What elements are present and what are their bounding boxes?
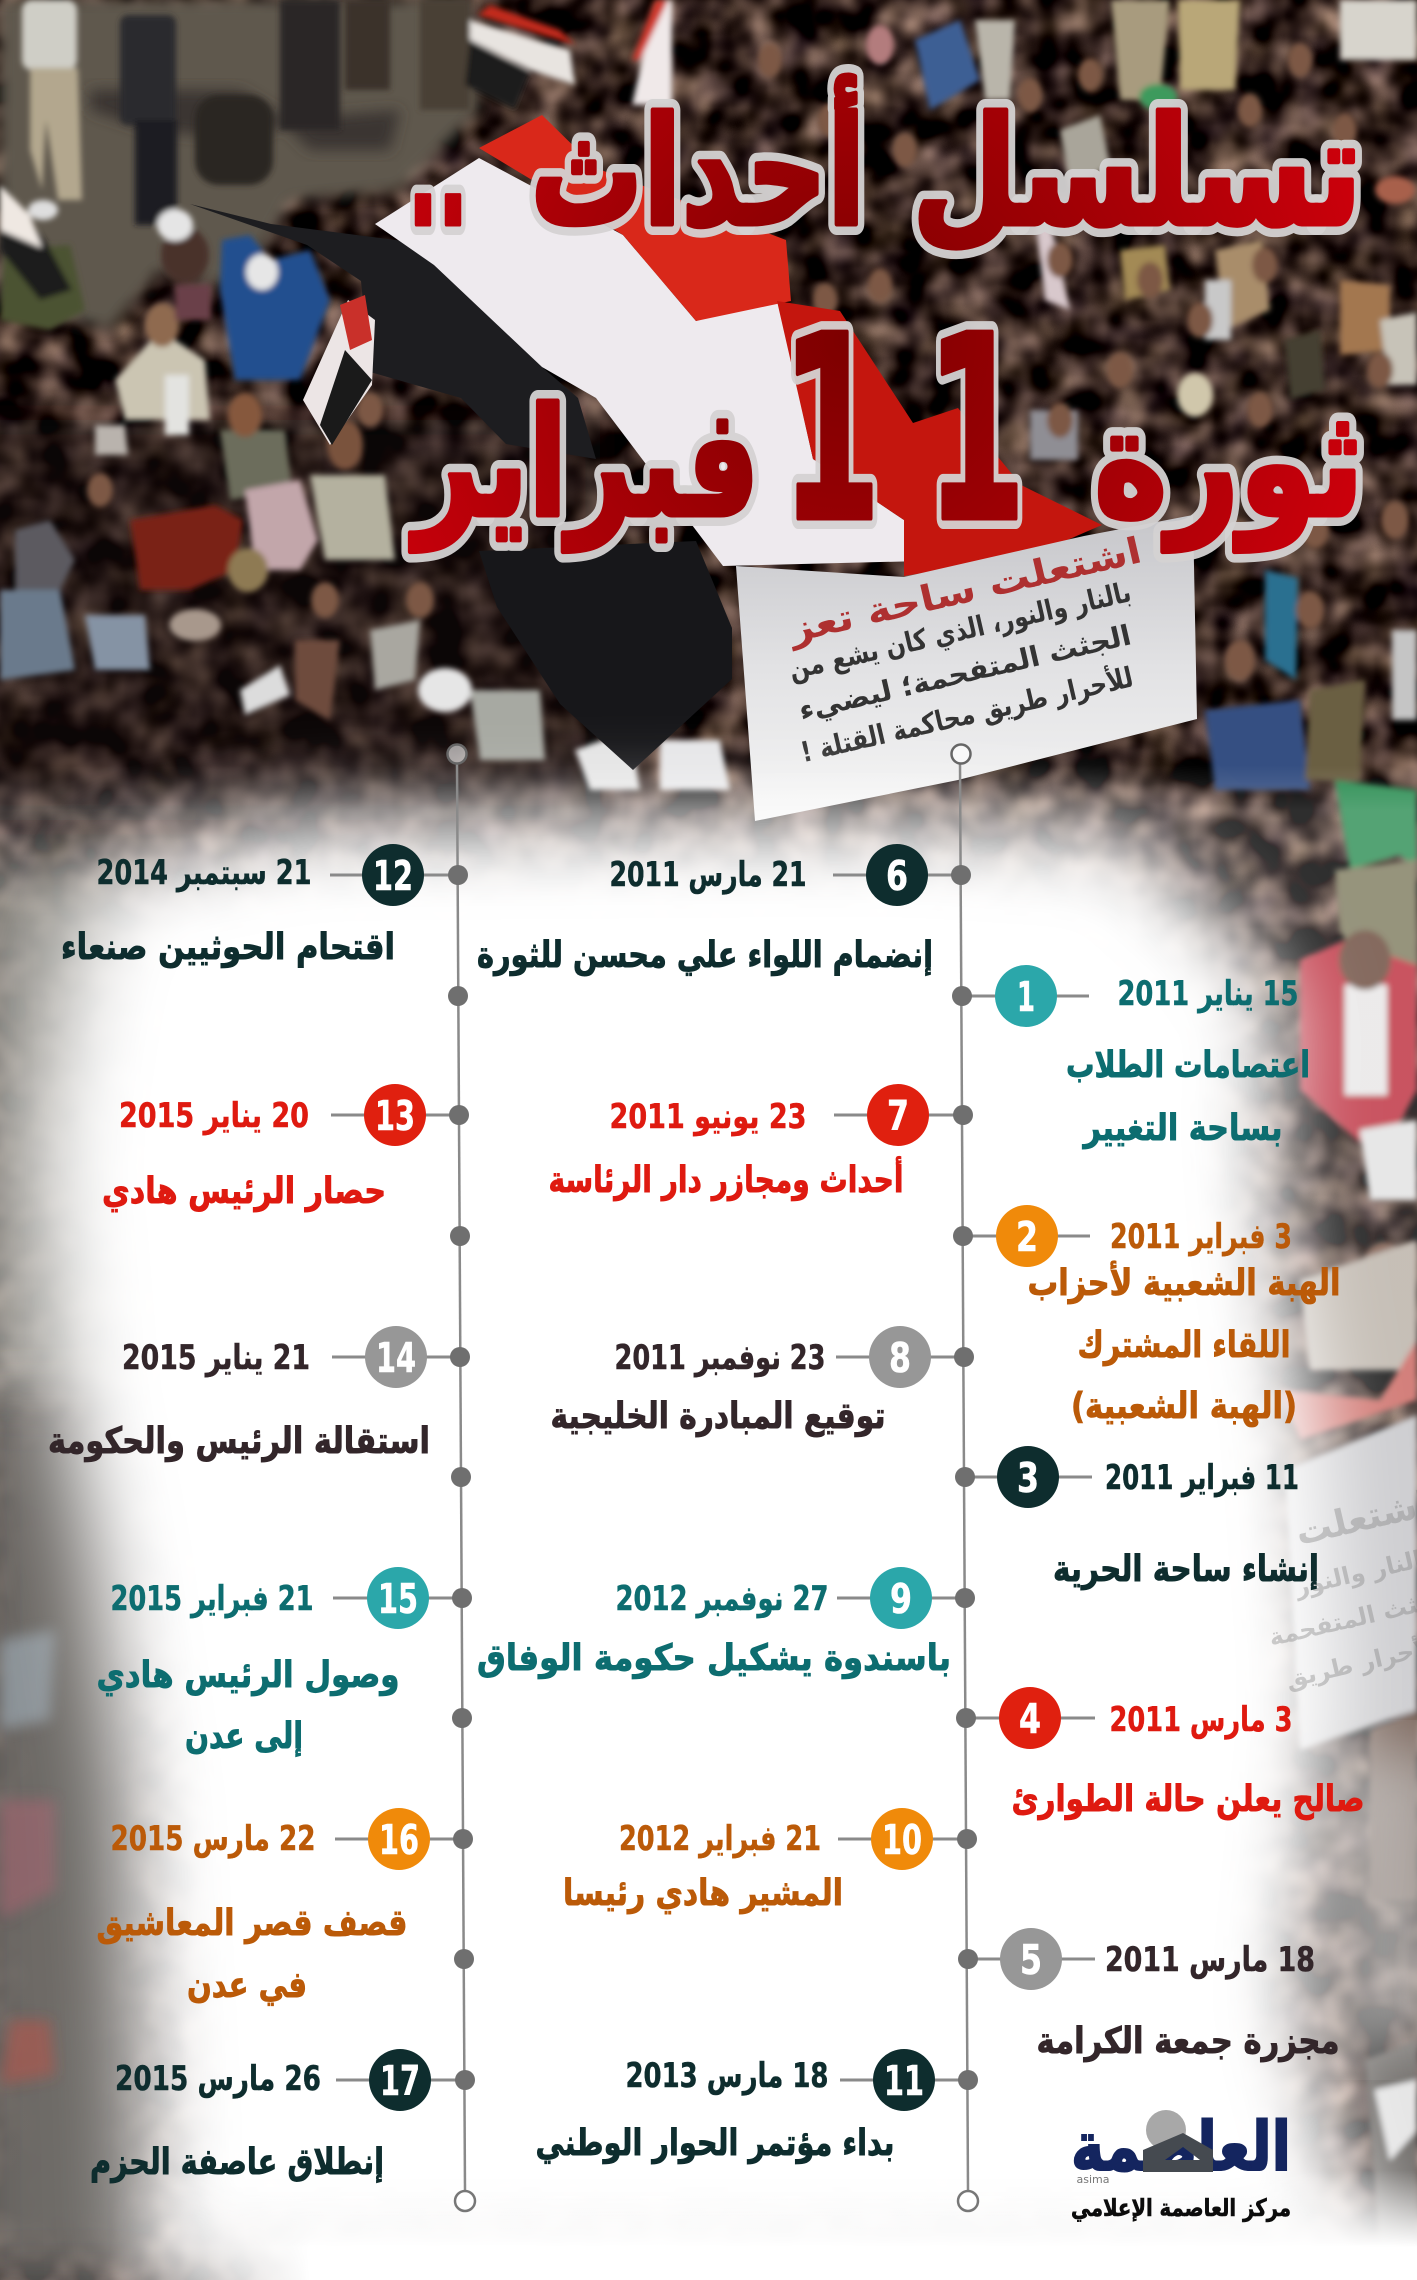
description 1 [1066, 1045, 1310, 1149]
event 1 [952, 965, 1310, 1149]
description 11: بداء مؤتمر الحوار الوطني [536, 2123, 894, 2164]
white fade panel behind timeline [0, 765, 1417, 2280]
logo caption: مركز العاصمة الإعلامي [1071, 2194, 1291, 2222]
road area [0, 0, 480, 330]
event 11: 11 [884, 2057, 924, 2105]
date 4: 3 مارس 2011 [1110, 1700, 1292, 1740]
logo small latin tag: asima [1077, 2173, 1109, 2186]
description 16: قصف قصر المعاشيق [96, 1903, 408, 1944]
event 12 [61, 844, 468, 968]
right edge fog [1340, 1750, 1417, 2050]
description 1: بساحة التغيير [1082, 1108, 1282, 1149]
event 15: 15 [378, 1575, 418, 1623]
ghost banner text at right edge [1266, 1484, 1417, 1694]
event 5 [958, 1928, 1340, 2062]
title outline layer: فبراير [409, 377, 760, 552]
description 1: اعتصامات الطلاب [1066, 1045, 1310, 1086]
date 11: 18 مارس 2013 [626, 2056, 828, 2096]
description 2: (الهبة الشعبية) [1071, 1386, 1297, 1427]
description 12: اقتحام الحوثيين صنعاء [61, 927, 395, 968]
date 6: 21 مارس 2011 [610, 855, 806, 895]
title fill layer: .. [408, 86, 468, 260]
event 16: 16 [379, 1816, 419, 1864]
upper crowd [1111, 0, 1170, 100]
description 8: توقيع المبادرة الخليجية [550, 1396, 886, 1437]
banner text: بالنار والنور، الذي كان يشع من [786, 575, 1134, 686]
description 14: استقالة الرئيس والحكومة [48, 1421, 430, 1462]
logo: Al-Asima media center [1071, 2108, 1291, 2222]
description 2 [1028, 1260, 1340, 1427]
protest banner [736, 515, 1197, 821]
banner text: اشتعلت ساحة تعز [783, 530, 1145, 652]
event 12: 12 [373, 852, 413, 900]
description 6: إنضمام اللواء علي محسن للثورة [477, 935, 933, 976]
date 2: 3 فبراير 2011 [1110, 1217, 1292, 1257]
title fill layer: 1 [781, 282, 881, 579]
event 17 [90, 2049, 475, 2183]
event 2: 2 [1016, 1213, 1038, 1261]
description 13: حصار الرئيس هادي [102, 1171, 386, 1212]
event 10 [563, 1808, 977, 1914]
event 14: 14 [376, 1334, 416, 1382]
event 4 [956, 1687, 1364, 1820]
icon: globe [1146, 2110, 1186, 2150]
event 13 [102, 1084, 469, 1212]
description 17: إنطلاق عاصفة الحزم [90, 2142, 384, 2183]
date 10: 21 فبراير 2012 [619, 1819, 821, 1859]
title outline layer: ثورة [1094, 377, 1364, 552]
dark shade over lower-left crowd [0, 420, 600, 820]
description 9: باسندوة يشكيل حكومة الوفاق [477, 1638, 951, 1679]
date 16: 22 مارس 2015 [110, 1819, 316, 1859]
event 15 [96, 1567, 472, 1757]
event 7: 7 [887, 1092, 909, 1140]
date 7: 23 يونيو 2011 [610, 1097, 806, 1137]
banner text: الجثث المتفحمة؛ ليضيء [796, 618, 1134, 727]
title outline layer: 1 [926, 282, 1026, 579]
event 9 [477, 1567, 975, 1679]
event 16 [96, 1808, 473, 2006]
title fill layer: 1 [926, 282, 1026, 579]
banner text: للأحرار طريق محاكمة القتلة ! [797, 659, 1136, 769]
title fill layer: ثورة [1094, 377, 1364, 552]
logo wordmark: العاصمة [1071, 2108, 1291, 2187]
date 13: 20 يناير 2015 [119, 1096, 309, 1136]
logo grey centre mark [1143, 2133, 1213, 2172]
date 3: 11 فبراير 2011 [1105, 1458, 1299, 1498]
date 15: 21 فبراير 2015 [110, 1579, 314, 1619]
flag [190, 115, 1102, 770]
timeline axis: right [952, 744, 978, 2211]
event 3: 3 [1017, 1454, 1039, 1502]
event 8 [550, 1326, 974, 1437]
event 17: 17 [380, 2057, 420, 2105]
description 16: في عدن [187, 1965, 307, 2006]
event 7 [548, 1084, 973, 1201]
event 1: 1 [1017, 973, 1035, 1021]
left edge faded figures [0, 1630, 55, 2085]
date 8: 23 نوفمبر 2011 [614, 1338, 826, 1378]
title outline layer: أحداث [530, 75, 866, 260]
event 4: 4 [1019, 1695, 1041, 1743]
event 6: 6 [886, 852, 908, 900]
title fill layer [408, 75, 1364, 579]
banner text [783, 530, 1145, 769]
event 14 [48, 1326, 470, 1462]
description 15: وصول الرئيس هادي [96, 1655, 400, 1696]
date 14: 21 يناير 2015 [122, 1338, 310, 1378]
description 16 [96, 1903, 408, 2006]
date 9: 27 نوفمبر 2012 [616, 1579, 828, 1619]
date 12: 21 سبتمبر 2014 [96, 853, 312, 893]
title fill layer: أحداث [530, 75, 866, 260]
left edge fog: lower dark [0, 1400, 160, 2280]
timeline axis: left [448, 744, 475, 2211]
description 10: المشير هادي رئيسا [563, 1873, 843, 1914]
event 8: 8 [889, 1334, 911, 1382]
event 11 [536, 2049, 978, 2164]
title [408, 75, 1364, 579]
event 6 [477, 844, 971, 976]
description 15: إلى عدن [185, 1716, 303, 1757]
description 15 [96, 1655, 400, 1757]
date 1: 15 يناير 2011 [1118, 974, 1298, 1014]
description 2: اللقاء المشترك [1078, 1325, 1290, 1366]
event 3 [955, 1446, 1319, 1590]
description 2: الهبة الشعبية لأحزاب [1028, 1260, 1340, 1304]
title outline layer [408, 75, 1364, 579]
event 13: 13 [375, 1092, 415, 1140]
description 7: أحداث ومجازر دار الرئاسة [548, 1156, 904, 1201]
description 3: إنشاء ساحة الحرية [1053, 1549, 1319, 1590]
date 17: 26 مارس 2015 [115, 2059, 321, 2099]
left edge fog: upper grey [0, 860, 140, 1420]
title outline layer: 1 [781, 282, 881, 579]
lower faded crowd shown at page edges [1335, 780, 1417, 870]
event 2 [953, 1205, 1340, 1427]
date 5: 18 مارس 2011 [1105, 1940, 1315, 1980]
title fill layer: فبراير [409, 377, 760, 552]
description 5: مجزرة جمعة الكرامة [1036, 2021, 1340, 2062]
title outline layer: .. [408, 86, 468, 260]
unnumbered axis dots [448, 986, 474, 1969]
event 9: 9 [890, 1575, 912, 1623]
event 10: 10 [882, 1816, 922, 1864]
event 5: 5 [1020, 1936, 1042, 1984]
